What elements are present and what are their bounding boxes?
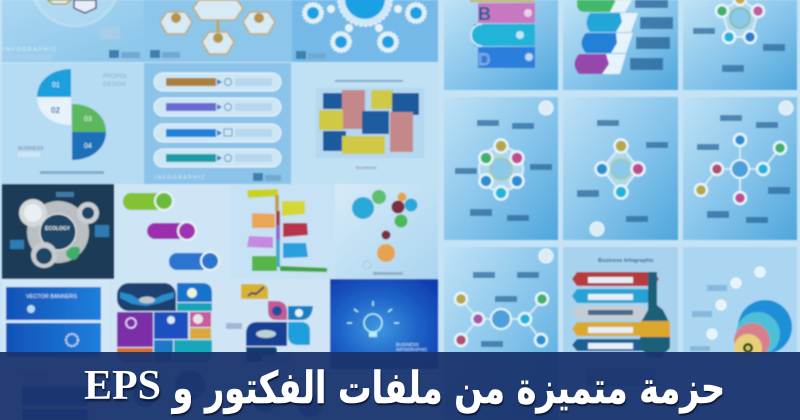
panel: ecology dark circles: ECOLOGY [45,226,71,232]
panel: four pill rows [144,63,291,184]
panel: ring of five nodes [683,0,797,90]
panel: glowing idea bulb: BUSINESS [396,342,419,347]
panel: vector banners: BUSINESS [22,372,45,377]
panel: petal diagram 01 to 04: PROPOL [103,74,129,80]
panel: cycle infographic top left [2,0,144,62]
panel: A B C D tabs: D [478,50,490,69]
panel: petal diagram 01 to 04: BUSINESS [18,146,44,152]
panel: A B C D tabs [444,0,558,90]
panel: option arrows [563,0,678,90]
title band [0,352,800,420]
panel: petal diagram 01 to 04: 03 [84,116,92,123]
title text: EPS [84,363,161,409]
panel: cycle infographic top left: INFOGRAPHIC [3,47,58,53]
panel: key banners [563,247,678,420]
panel: concentric circles [683,247,797,420]
panel: lower branching nodes [444,247,558,420]
panel: vector banners: VECTOR BANNERS [26,294,77,300]
panel: gears infographic [292,0,438,62]
panel: petal diagram 01 to 04 [2,63,144,184]
panel: handshake shapes [220,279,330,369]
panel: colour block collage: BUSINESS [356,165,377,170]
panel: A B C D tabs: B [478,4,491,24]
panel: six node ring [444,97,558,240]
panel: four node ring [563,97,678,240]
panel: colour block collage [291,63,438,184]
panel: petal diagram 01 to 04: 04 [84,143,92,150]
panel: ecology dark circles [2,184,114,279]
gears behind the title band [133,370,322,417]
panel: hexagon infographic [144,0,292,62]
panel: three pills [115,184,230,279]
panel: glowing idea bulb [330,279,438,369]
panel: question mark of circles [335,184,438,279]
panel: petal diagram 01 to 04: DESIGN [103,82,126,88]
panel: key banners: Business Infographic [598,258,654,264]
panel: branching nodes [683,97,797,240]
panel: petal diagram 01 to 04: 01 [52,82,60,89]
title text: حزمة متميزة من ملفات الفكتور و [172,363,725,414]
panel: glowing idea bulb: INFOGRAPHIC [396,347,428,352]
panel: stepped colour cards [231,184,335,279]
panel: petal diagram 01 to 04: 02 [51,106,60,115]
panel: rounded tile infographic [110,279,220,369]
panel: vector banners [2,279,110,420]
panel: four pill rows: INFOGRAPHIC [155,175,206,181]
